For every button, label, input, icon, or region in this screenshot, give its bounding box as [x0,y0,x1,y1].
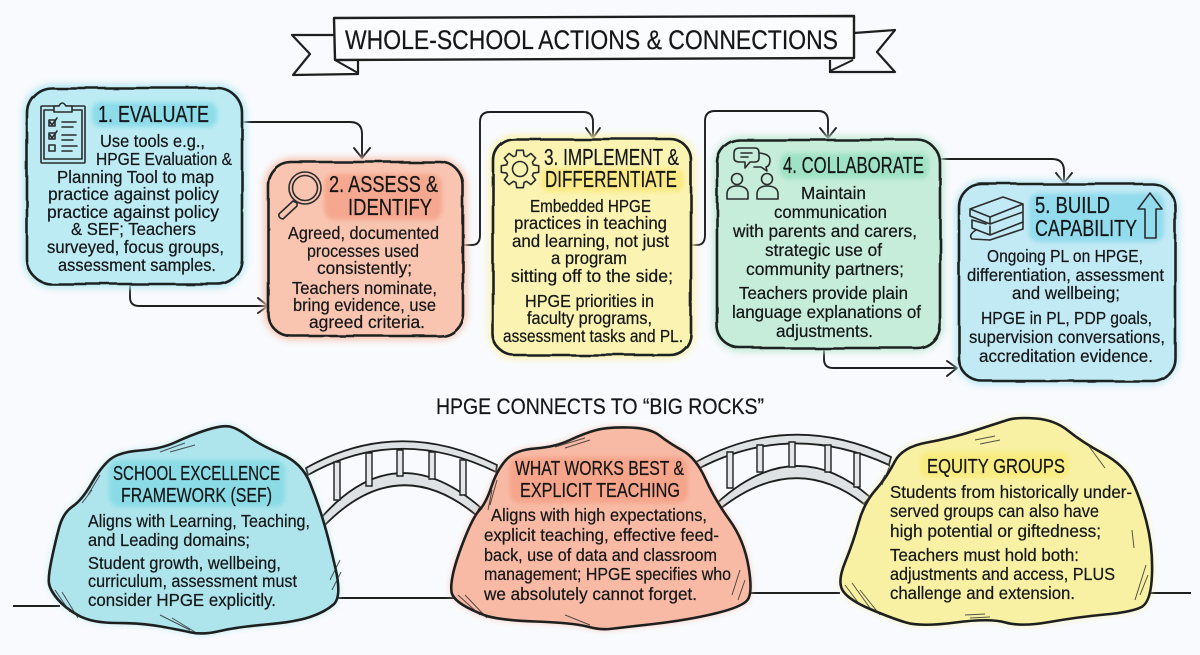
body text: management; HPGE specifies who [484,564,731,584]
bridge: right [696,435,891,509]
body text: curriculum, assessment must [88,571,297,591]
heading [515,458,685,502]
body text [732,183,921,341]
arrow: evaluate to assess (top) [242,122,370,158]
body text: Aligns with high expectations, [491,505,707,525]
body text: with parents and carers, [732,221,917,241]
panel: 2 assess and identify [264,158,467,340]
title banner: WHOLE-SCHOOL ACTIONS & CONNECTIONS [345,25,838,55]
rock: school excellence framework [49,426,341,633]
icon: clipboard checklist [41,103,85,163]
body text: processes used [307,241,419,261]
heading highlight [92,102,217,127]
body text [483,505,731,604]
bridge: left [306,441,497,527]
body text [890,482,1132,603]
body text [288,223,439,332]
body text: assessment tasks and PL. [503,326,683,346]
body text: back, use of data and classroom [484,545,717,565]
arrow: implement to collaborate [691,111,836,245]
body text: bring evidence, use [293,295,436,315]
body text: surveyed, focus groups, [47,237,224,257]
body text: Planning Tool to map [57,167,214,187]
heading: EQUITY GROUPS [927,456,1065,478]
heading [544,144,679,192]
body text: Teachers nominate, [292,278,437,298]
body text: explicit teaching, effective feed- [484,525,719,545]
arrow: assess to implement [463,112,600,245]
heading highlight [109,460,285,507]
icon: gear [501,150,539,188]
body text [88,511,310,610]
body text: we absolutely cannot forget. [483,584,697,604]
body text: challenge and extension. [890,583,1075,603]
body text: consistently; [317,258,412,278]
heading: 4. COLLABORATE [783,152,924,178]
heading: IDENTIFY [348,194,432,220]
body text: faculty programs, [527,308,652,328]
arrow: evaluate to assess (bottom) [130,285,268,313]
heading highlight [324,174,442,220]
panel: 3 implement and differentiate [489,135,695,359]
heading: DIFFERENTIATE [545,166,677,192]
body text: HPGE Evaluation & [96,149,232,169]
body text: practice against policy [47,202,219,222]
ground line [13,593,1191,606]
body text: sitting off to the side; [511,266,673,286]
heading: WHAT WORKS BEST & [515,458,685,480]
icon: stack of books [970,197,1023,240]
rock: equity groups [840,418,1152,625]
heading highlight [1029,193,1164,242]
body text [967,246,1165,366]
arrow: collaborate to build capability (top) [938,159,1072,183]
body text: accreditation evidence. [979,346,1153,366]
body text: & SEF; Teachers [71,219,196,239]
heading: 1. EVALUATE [98,101,209,127]
body text: strategic use of [765,240,882,260]
body text: Student growth, wellbeing, [88,553,281,573]
body text: and Leading domains; [88,530,250,550]
body text: language explanations of [732,302,921,322]
body text: agreed criteria. [309,312,425,332]
body text: and wellbeing; [1012,283,1120,303]
body text: high potential or giftedness; [890,521,1101,541]
body text: practices in teaching [514,213,667,233]
icon: up arrow [1138,193,1162,238]
body text: community partners; [746,259,904,279]
heading: 5. BUILD [1035,192,1110,218]
title banner [292,16,895,75]
body text: differentiation, assessment [967,265,1164,285]
body text: supervision conversations, [969,327,1165,347]
body text: Agreed, documented [288,223,439,243]
panel: 1 evaluate [23,84,246,288]
panel: 5 build capability [955,180,1179,385]
body text: Maintain [801,183,866,203]
heading highlight [510,457,688,503]
body text: Embedded HPGE [530,196,651,216]
icon: magnifying glass [279,172,321,219]
heading [1035,192,1137,241]
body text: Students from historically under- [890,482,1132,502]
rock: what works best and explicit teaching [451,427,751,629]
heading [113,463,280,507]
heading: CAPABILITY [1035,215,1137,241]
heading: big rocks: HPGE CONNECTS TO “BIG ROCKS” [436,394,764,419]
body text: consider HPGE explicitly. [88,590,276,610]
heading highlight [920,452,1069,478]
body text [503,196,683,346]
body text: adjustments. [776,321,873,341]
body text: Teachers provide plain [739,283,908,303]
body text: Aligns with Learning, Teaching, [88,511,310,531]
body text [47,131,232,275]
body text: HPGE in PL, PDP goals, [981,308,1152,328]
body text: Teachers must hold both: [890,545,1079,565]
body text: a program [551,248,627,268]
body text: Ongoing PL on HPGE, [987,246,1143,266]
heading highlight [780,153,929,179]
heading: EXPLICIT TEACHING [520,480,680,502]
body text: assessment samples. [58,255,216,275]
icon: people talking [727,148,778,199]
heading [329,171,438,220]
body text: communication [774,202,887,222]
body text: adjustments and access, PLUS [890,564,1115,584]
body text: and learning, not just [512,231,669,251]
heading: 2. ASSESS & [329,171,438,197]
body text: practice against policy [48,184,219,204]
heading: FRAMEWORK (SEF) [121,485,272,507]
body text: Use tools e.g., [100,131,205,151]
heading: 3. IMPLEMENT & [544,144,679,170]
heading highlight [541,168,684,192]
heading: SCHOOL EXCELLENCE [113,463,280,485]
arrow: collaborate to build capability (bottom) [824,349,957,376]
body text: HPGE priorities in [525,291,654,311]
panel: 4 collaborate [713,136,944,352]
body text: served groups can also have [890,501,1099,521]
